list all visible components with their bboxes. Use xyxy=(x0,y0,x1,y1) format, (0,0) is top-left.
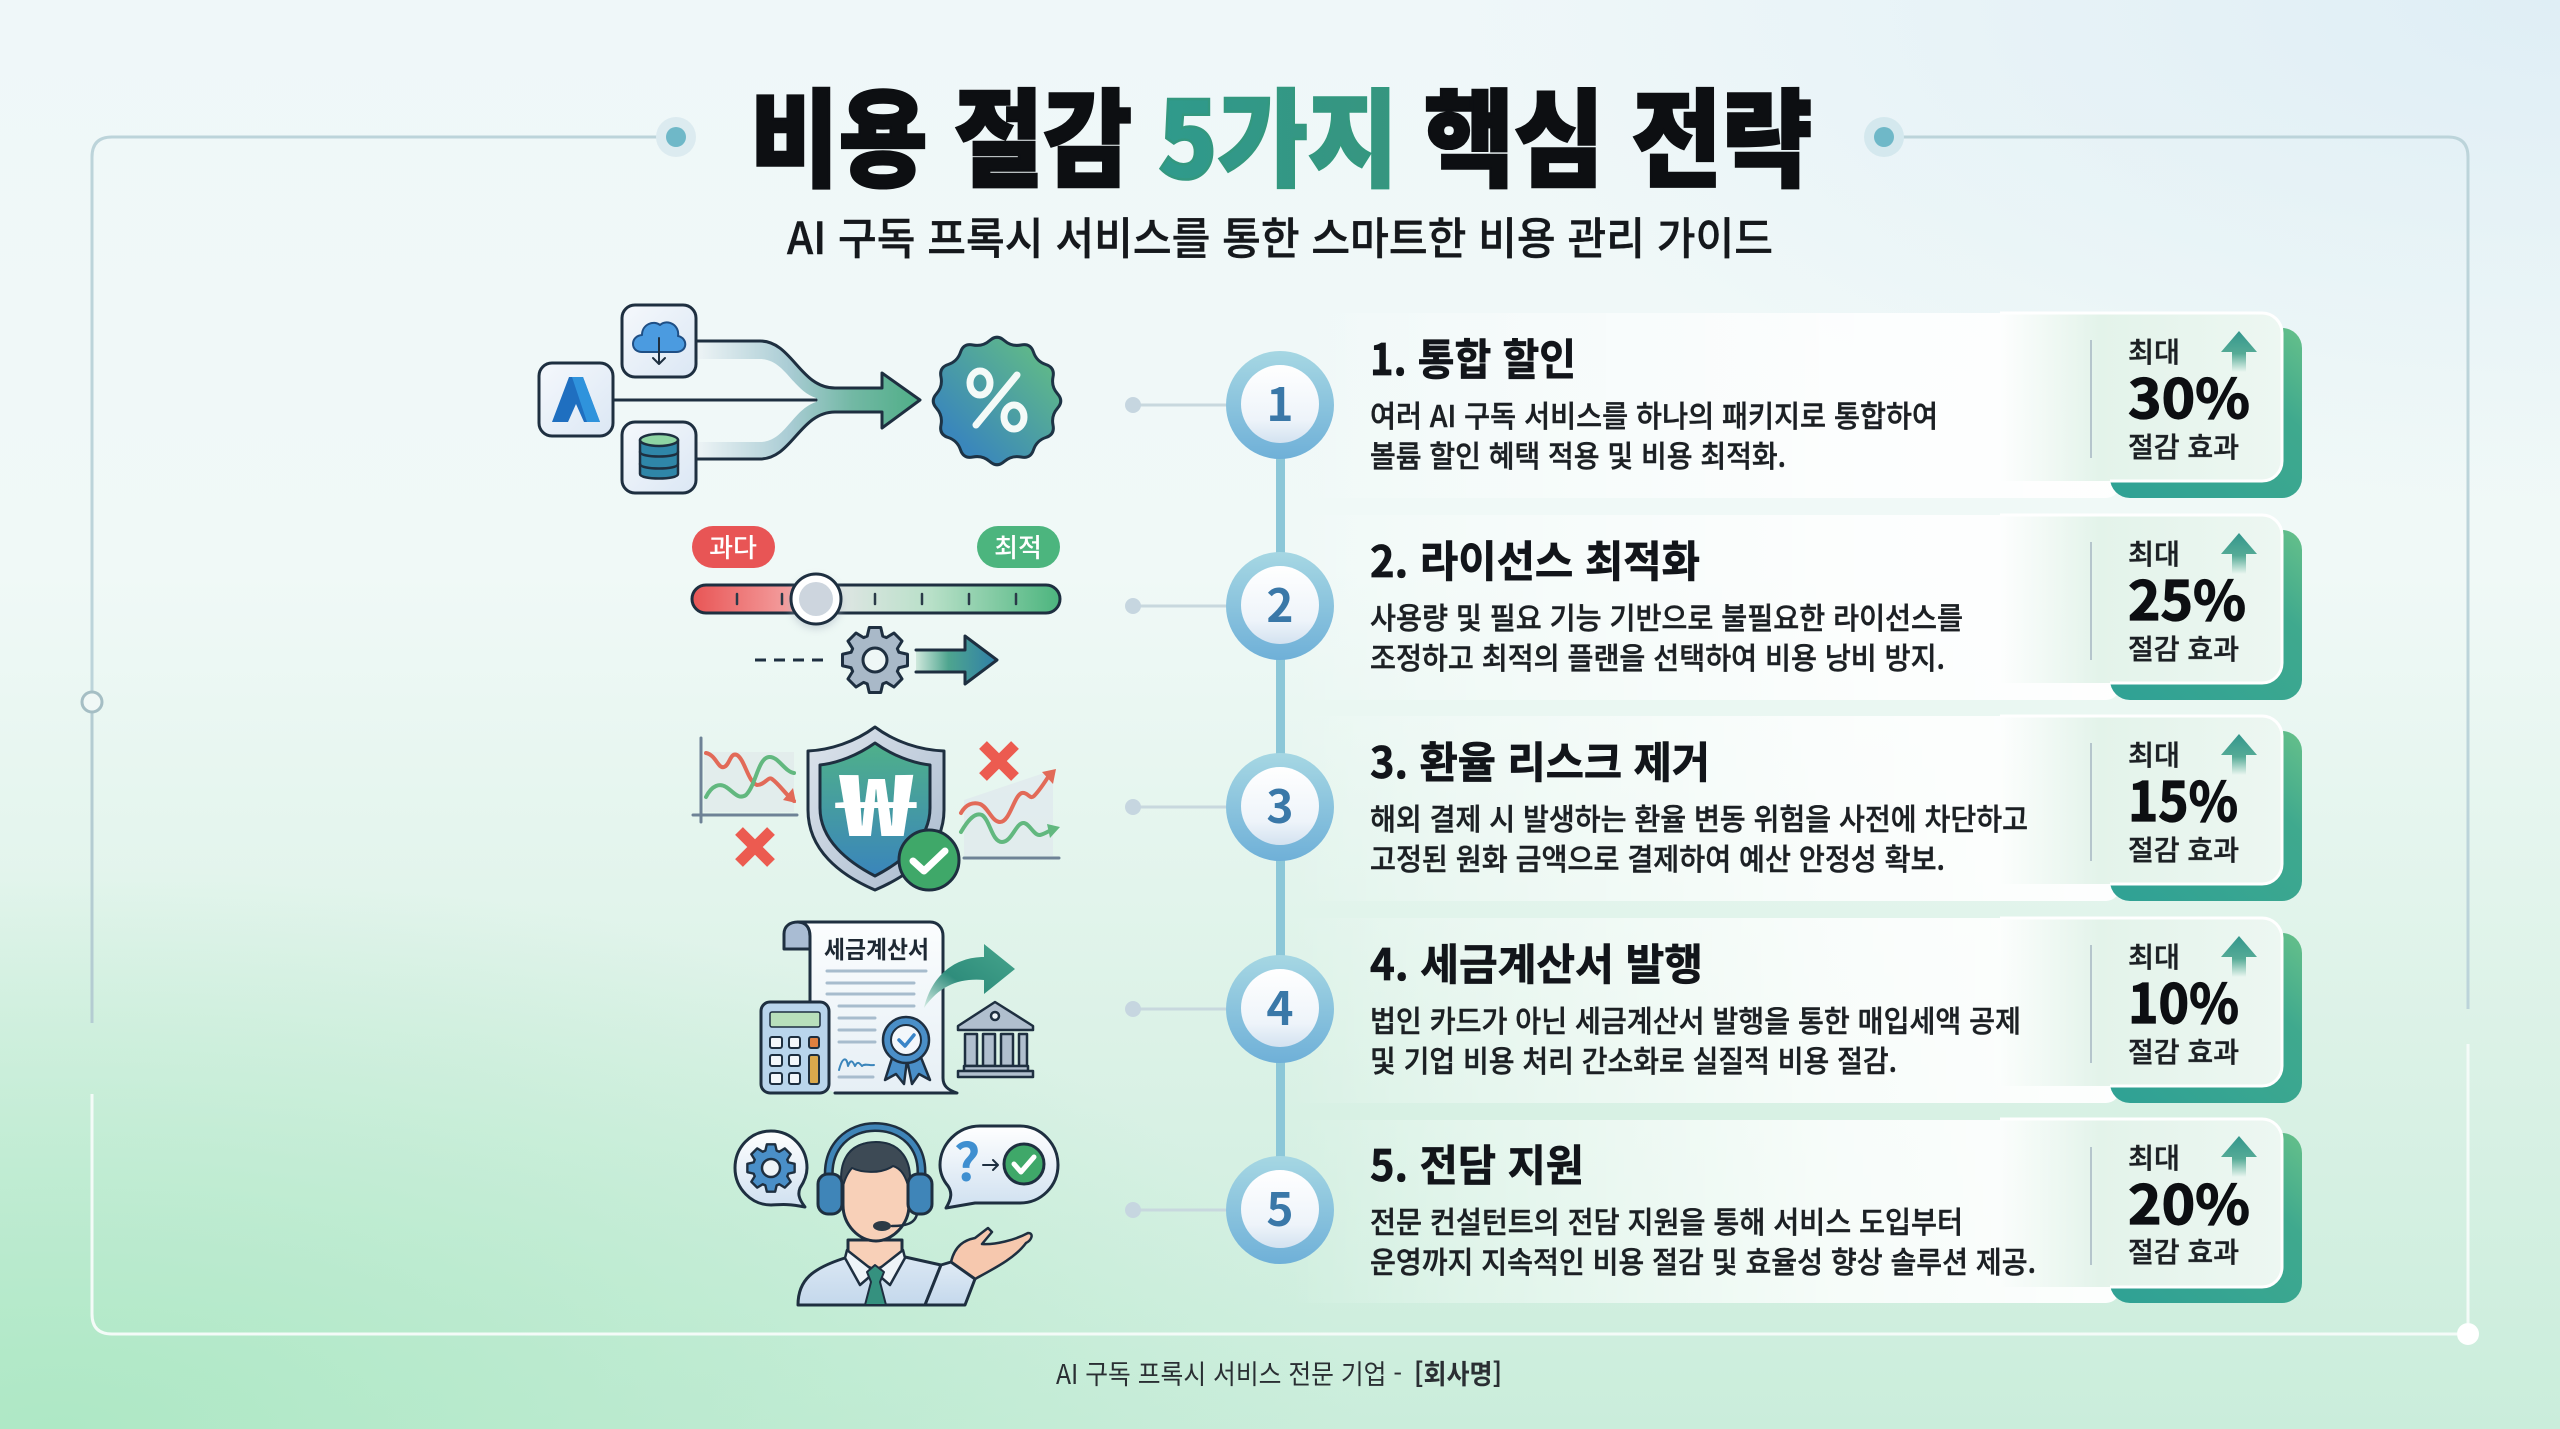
panel: strategy 4: 및 기업 비용 처리 간소화로 실질적 비용 절감. xyxy=(1370,1037,1897,1081)
panel: strategy 3: 고정된 원화 금액으로 결제하여 예산 안정성 확보. xyxy=(1370,835,1945,879)
panel: strategy 5: 5 xyxy=(1266,1174,1294,1240)
panel: strategy 1 xyxy=(1226,313,2302,498)
panel: strategy 4 xyxy=(1226,918,2302,1103)
footer: [회사명] xyxy=(1414,1353,1502,1392)
panel: strategy 5: 최대 xyxy=(2128,1137,2180,1177)
footer: AI 구독 프록시 서비스 전문 기업 - xyxy=(1056,1353,1402,1392)
panel: strategy 4: 법인 카드가 아닌 세금계산서 발행을 통한 매입세액 공제 xyxy=(1370,997,2021,1041)
panel: strategy 4: 4. 세금계산서 발행 xyxy=(1370,931,1703,993)
panel: strategy 3: 3. 환율 리스크 제거 xyxy=(1370,729,1710,791)
title: 비용 절감 xyxy=(750,55,1132,209)
panel: strategy 3: 15% xyxy=(2128,758,2238,837)
panel: strategy 1: 볼륨 할인 혜택 적용 및 비용 최적화. xyxy=(1370,432,1786,476)
panel: strategy 4: 절감 효과 xyxy=(2128,1031,2239,1071)
panel: strategy 5: 5. 전담 지원 xyxy=(1370,1132,1584,1194)
timeline connector xyxy=(1125,397,1285,1218)
panel: strategy 1: 최대 xyxy=(2128,331,2180,371)
icon: merge services into discount xyxy=(539,305,1061,493)
panel: strategy 5 xyxy=(1226,1119,2302,1303)
panel: strategy 3: 3 xyxy=(1266,771,1294,837)
panel: strategy 4: 최대 xyxy=(2128,936,2180,976)
icon: dedicated support agent xyxy=(735,1121,1058,1305)
panel: strategy 5: 전문 컨설턴트의 전담 지원을 통해 서비스 도입부터 xyxy=(1370,1198,1963,1242)
panel: strategy 5: 운영까지 지속적인 비용 절감 및 효율성 향상 솔루션 제공. xyxy=(1370,1238,2036,1282)
icon: license slider xyxy=(692,526,1060,693)
panel: strategy 1: 절감 효과 xyxy=(2128,426,2239,466)
panel: strategy 1: 1. 통합 할인 xyxy=(1370,326,1576,388)
panel: strategy 1: 여러 AI 구독 서비스를 하나의 패키지로 통합하여 xyxy=(1370,392,1938,436)
panel: strategy 3 xyxy=(1226,716,2302,901)
panel: strategy 2: 25% xyxy=(2128,557,2246,636)
panel: strategy 5: 20% xyxy=(2128,1161,2250,1240)
panel: strategy 1: 1 xyxy=(1266,369,1294,435)
panel: strategy 2 xyxy=(1226,515,2302,700)
panel: strategy 1: 30% xyxy=(2128,355,2250,434)
icon: license slider: 과다 xyxy=(709,528,757,565)
icon: dedicated support agent: ? xyxy=(954,1121,980,1196)
panel: strategy 5: 절감 효과 xyxy=(2128,1231,2239,1271)
panel: strategy 4: 4 xyxy=(1266,973,1294,1039)
title xyxy=(750,55,1812,209)
panel: strategy 2: 2 xyxy=(1266,570,1294,636)
panel: strategy 3: 절감 효과 xyxy=(2128,829,2239,869)
panel: strategy 3: 해외 결제 시 발생하는 환율 변동 위험을 사전에 차단하고 xyxy=(1370,795,2028,839)
panel: strategy 4: 10% xyxy=(2128,960,2239,1039)
icon: tax invoice xyxy=(761,922,1033,1093)
icon: license slider: 최적 xyxy=(994,528,1042,565)
icon: exchange rate shield: ₩ xyxy=(835,740,917,861)
title: 핵심 전략 xyxy=(1424,55,1812,209)
panel: strategy 2: 조정하고 최적의 플랜을 선택하여 비용 낭비 방지. xyxy=(1370,634,1945,678)
panel: strategy 2: 절감 효과 xyxy=(2128,628,2239,668)
title: 5가지 xyxy=(1158,55,1398,209)
icon: tax invoice: 세금계산서 xyxy=(824,930,929,965)
panel: strategy 3: 최대 xyxy=(2128,734,2180,774)
subtitle: AI 구독 프록시 서비스를 통한 스마트한 비용 관리 가이드 xyxy=(787,203,1773,267)
icon: exchange rate shield xyxy=(693,727,1060,890)
panel: strategy 2: 최대 xyxy=(2128,533,2180,573)
panel: strategy 2: 사용량 및 필요 기능 기반으로 불필요한 라이선스를 xyxy=(1370,594,1963,638)
panel: strategy 2: 2. 라이선스 최적화 xyxy=(1370,528,1700,590)
